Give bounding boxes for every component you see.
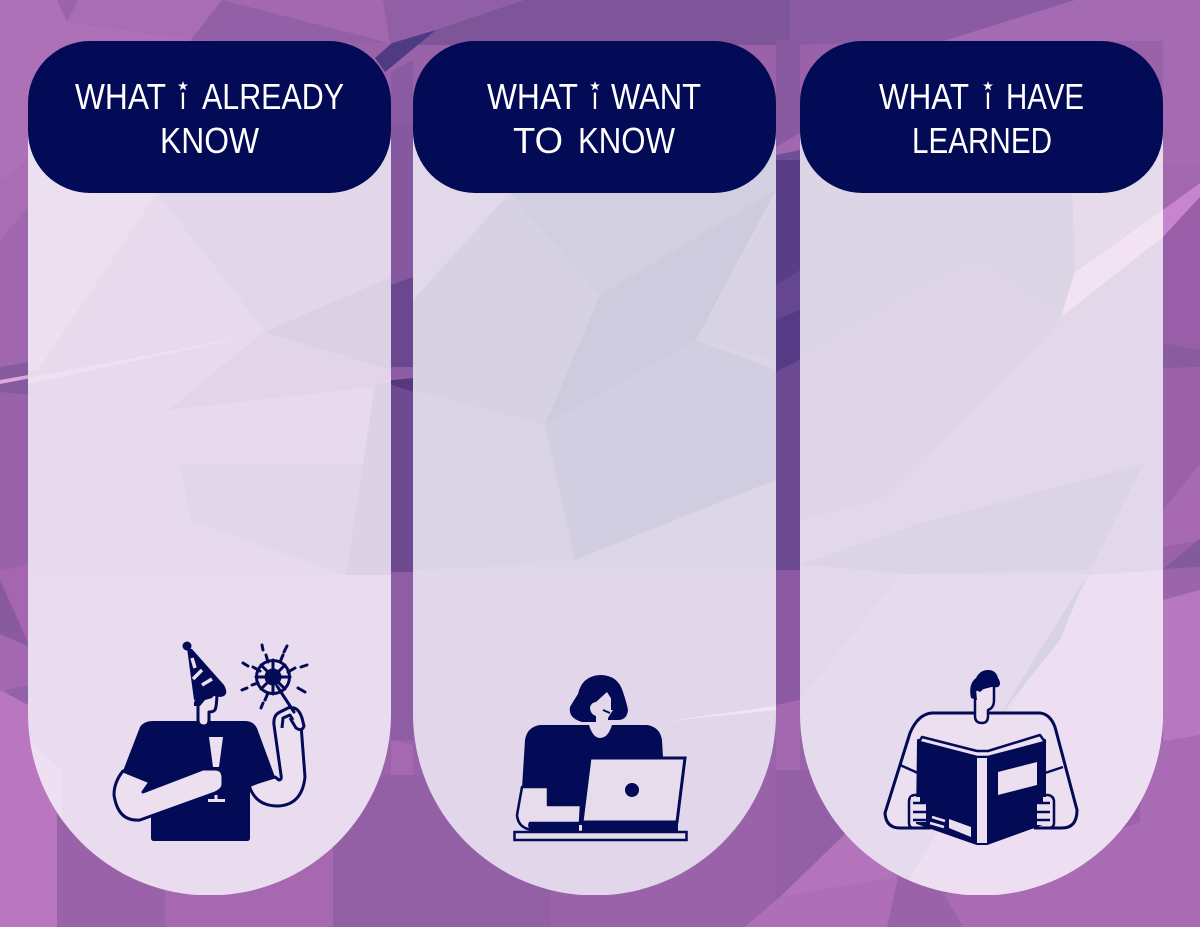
shirt	[123, 721, 275, 841]
panel: what I already know	[28, 120, 391, 895]
icon: man reading book	[885, 670, 1077, 844]
keyboard base	[530, 822, 678, 831]
sleeve seams	[900, 765, 1063, 773]
hair	[194, 688, 220, 706]
heading: what I already know: KNOW	[160, 120, 259, 161]
heading: what I have learned: LEARNED	[912, 120, 1052, 161]
sparkler	[242, 645, 307, 712]
heading: what I want to know	[413, 41, 776, 193]
book	[917, 740, 1045, 844]
heading: what I already know: I	[180, 88, 186, 115]
heading: what I have learned	[800, 41, 1163, 193]
forearm	[517, 787, 581, 830]
facial features	[603, 698, 612, 713]
party hat	[187, 648, 226, 700]
heading: what I have learned: WHAT	[879, 76, 969, 117]
left hand	[909, 795, 926, 828]
arm holding glass	[114, 769, 223, 820]
hand fingers	[282, 708, 304, 730]
raised arm	[249, 707, 305, 806]
heading: what I want to know: WANT	[611, 76, 701, 117]
heading: what I already know	[28, 41, 391, 193]
heading: what I already know: WHAT	[75, 76, 166, 117]
hair	[970, 670, 1000, 700]
heading: what I have learned: I	[985, 88, 991, 115]
heading: what I want to know: I	[592, 88, 598, 115]
icon: woman at laptop	[514, 675, 686, 840]
heading: what I have learned: HAVE	[1006, 76, 1084, 117]
heading: what I want to know: TO	[513, 120, 563, 161]
face and neck	[589, 692, 613, 738]
heading: what I want to know: WHAT	[487, 76, 578, 117]
hair	[570, 675, 628, 722]
torso	[522, 725, 663, 822]
laptop	[582, 758, 685, 822]
icon: man with party hat and sparkler	[114, 642, 307, 841]
desk	[514, 832, 686, 840]
right hand	[1037, 797, 1052, 825]
champagne glass	[208, 737, 225, 802]
body outline	[885, 713, 1077, 828]
head	[975, 685, 994, 723]
heading: what I want to know: KNOW	[578, 120, 675, 161]
panel: what I have learned	[800, 120, 1163, 895]
heading: what I already know: ALREADY	[202, 76, 344, 117]
head and neck	[198, 690, 217, 726]
panel: what I want to know	[413, 120, 776, 895]
